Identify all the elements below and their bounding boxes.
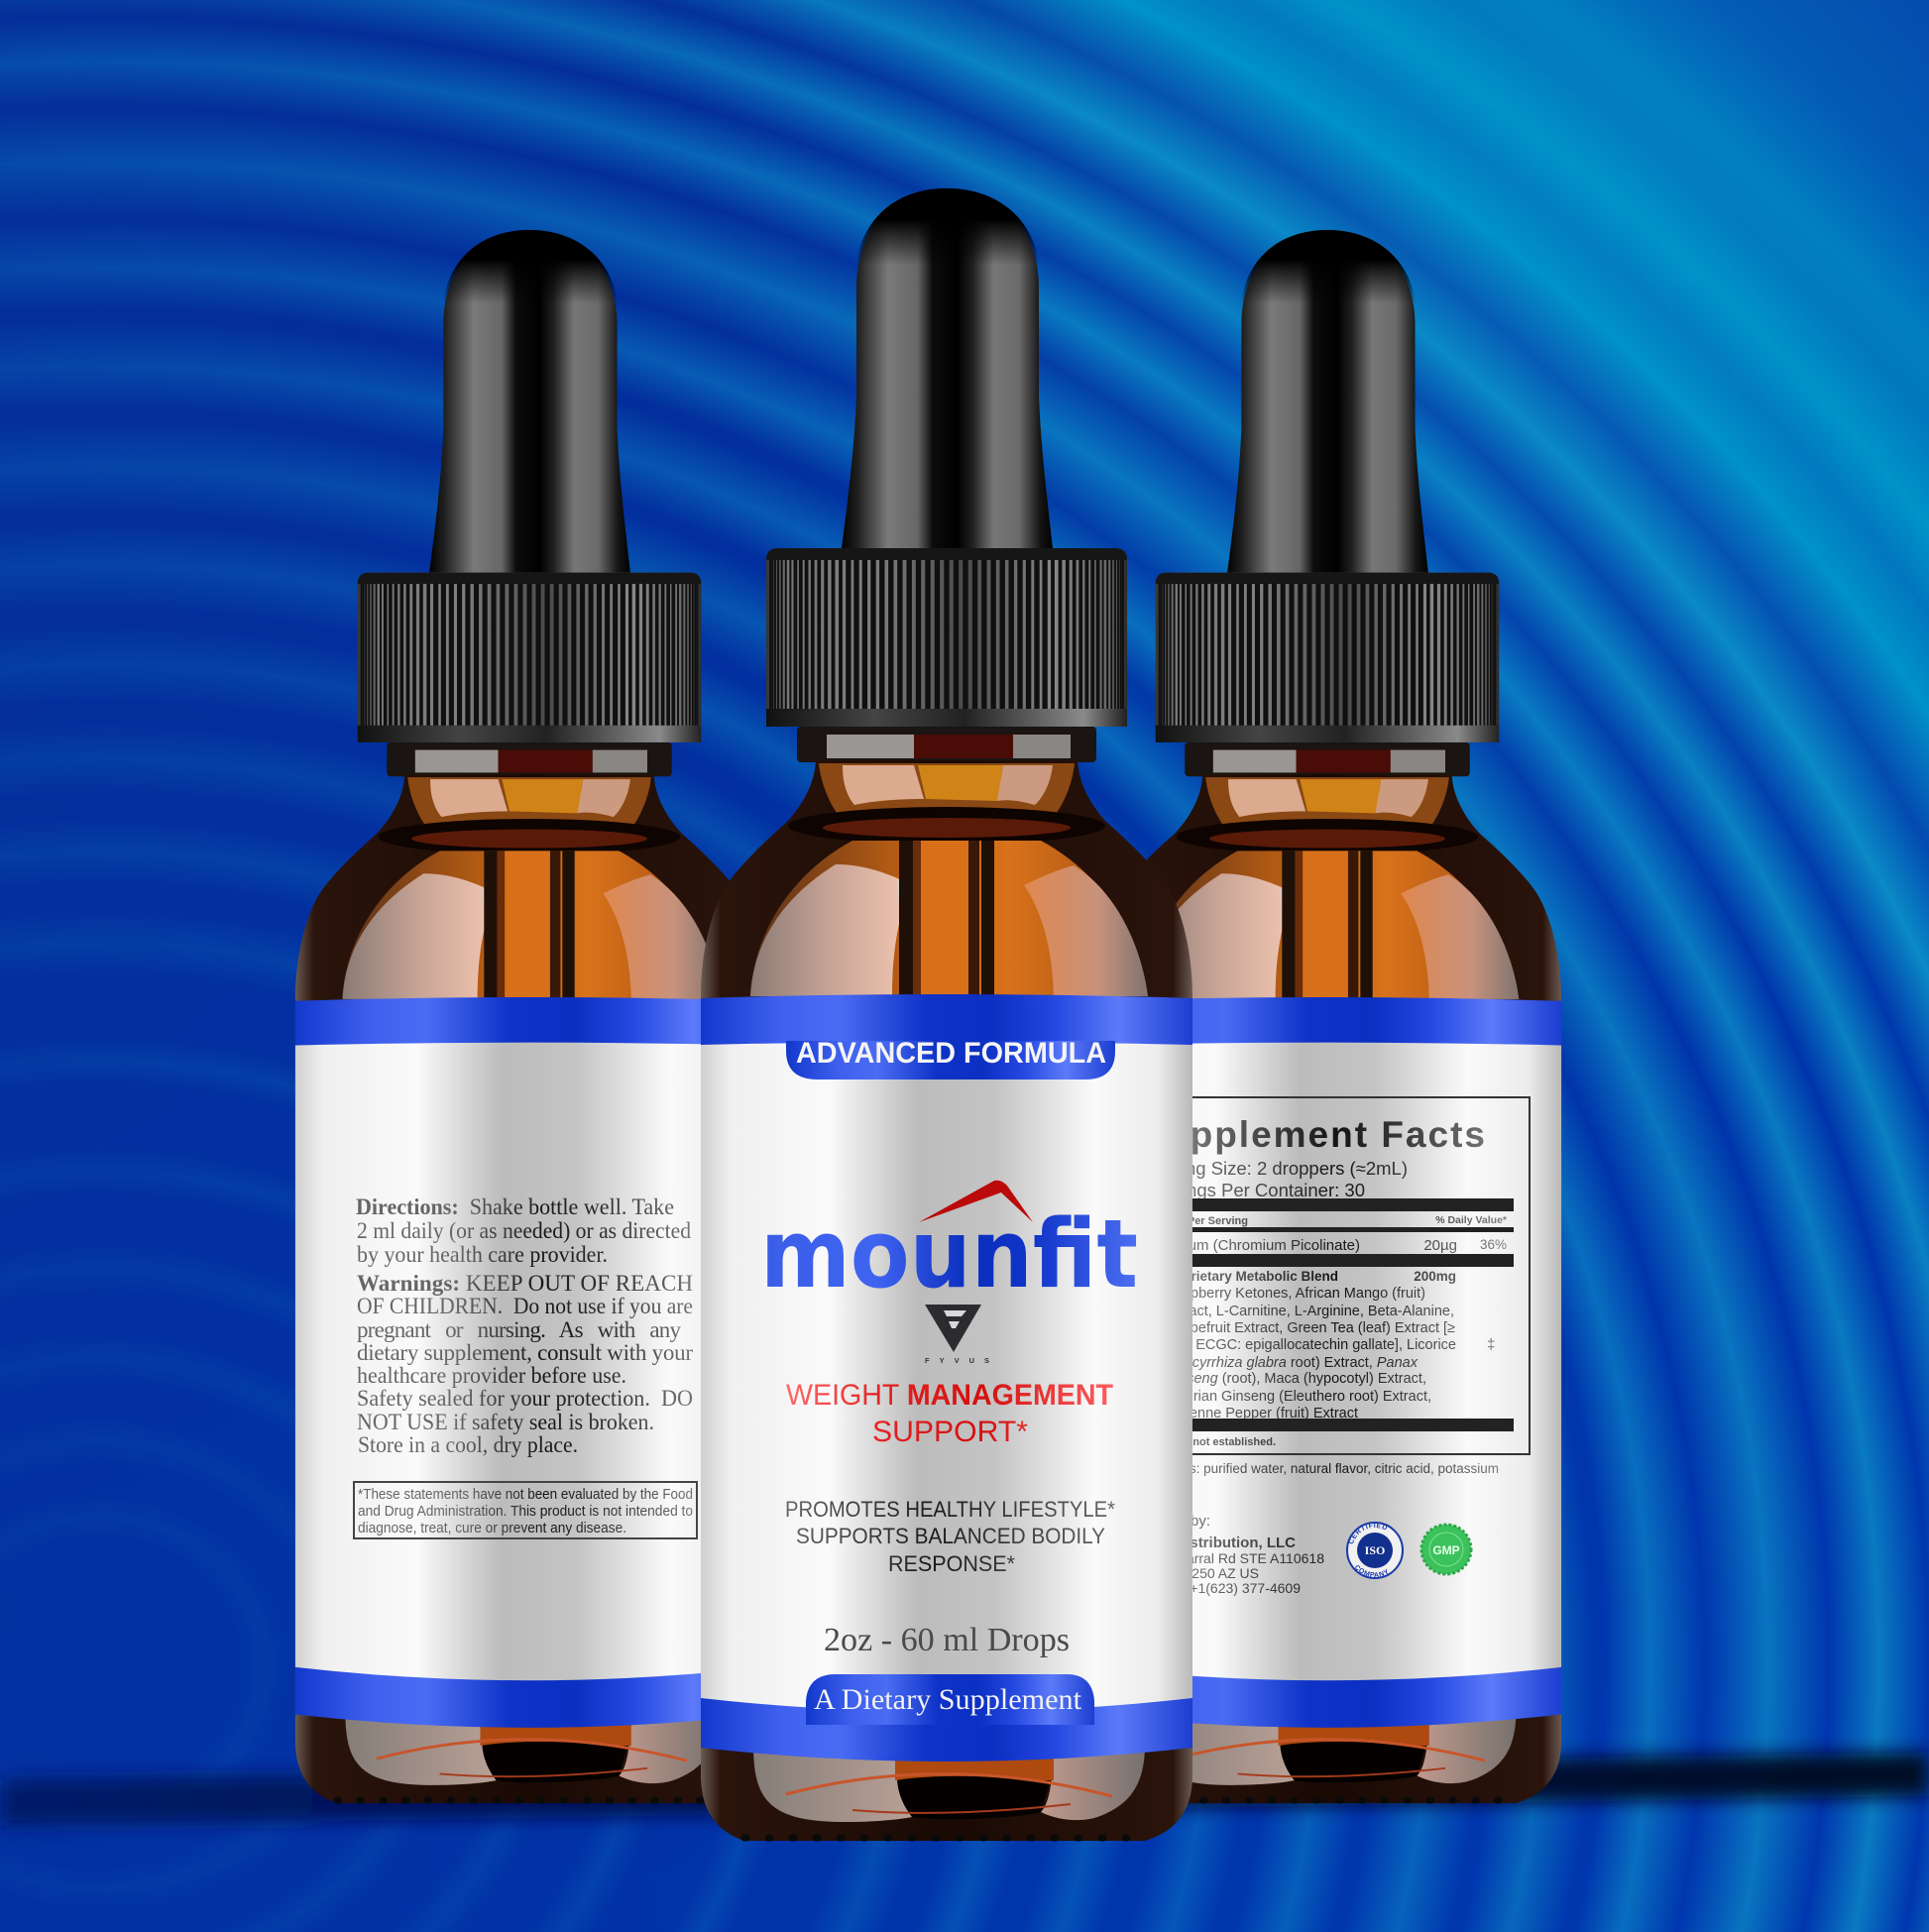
bottle: right (supplement facts) bbox=[1092, 230, 1562, 1804]
supplement facts panel: Ginseng (root), Maca (hypocotyl) Extract, bbox=[1165, 1371, 1426, 1387]
supplement facts panel: ‡Daily Value not established. bbox=[1126, 1436, 1276, 1448]
supplement facts panel: Supplement Facts bbox=[1139, 1114, 1487, 1155]
text block: directions and warnings: pregnant or nursing. As with any bbox=[357, 1317, 682, 1342]
text block: directions and warnings: Safety sealed for your protection. DO bbox=[357, 1386, 693, 1411]
FDA disclaimer box: diagnose, treat, cure or prevent any disease. bbox=[358, 1520, 626, 1536]
floor shadow at the horizon bbox=[0, 1753, 1929, 1826]
supplement facts panel: 200mg bbox=[1414, 1269, 1456, 1284]
supplement facts panel: Siberian Ginseng (Eleuthero root) Extract, bbox=[1165, 1389, 1431, 1405]
benefits text: RESPONSE* bbox=[888, 1551, 1015, 1576]
supplement facts panel: 20µg bbox=[1423, 1237, 1457, 1254]
text block: directions and warnings: dietary supplement, consult with your bbox=[357, 1340, 693, 1365]
logo: FYVUS: FYVUS bbox=[925, 1356, 999, 1365]
supplement facts panel: Cayenne Pepper (fruit) Extract bbox=[1164, 1406, 1358, 1421]
benefits text: SUPPORTS BALANCED BODILY bbox=[796, 1524, 1105, 1548]
icon: ISO badge: COMPANY bbox=[1355, 1565, 1388, 1577]
supplement facts panel bbox=[1110, 1097, 1530, 1454]
claim: weight management support: WEIGHT MANAGEMENT bbox=[786, 1379, 1113, 1412]
size: 2oz - 60 ml drops: 2oz - 60 ml Drops bbox=[824, 1622, 1070, 1658]
icon: GMP badge bbox=[1421, 1525, 1471, 1574]
text block: directions and warnings: Store in a cool, dry place. bbox=[358, 1432, 578, 1457]
supplement facts panel: Servings Per Container: 30 bbox=[1145, 1180, 1365, 1200]
text block: directions and warnings: by your health care provider. bbox=[357, 1242, 608, 1267]
text block: directions and warnings: 2 ml daily (or as needed) or as directed bbox=[357, 1218, 691, 1243]
supplement facts panel: Chromium (Chromium Picolinate) bbox=[1140, 1237, 1360, 1254]
FDA disclaimer box bbox=[354, 1482, 697, 1538]
supplement facts panel: % Daily Value* bbox=[1435, 1214, 1508, 1226]
icon: ISO badge bbox=[1346, 1522, 1404, 1579]
FDA disclaimer box: *These statements have not been evaluated by the Food bbox=[358, 1486, 693, 1503]
text block: directions and warnings: OF CHILDREN. Do not use if you are bbox=[357, 1294, 693, 1318]
badge: a dietary supplement: A Dietary Supplement bbox=[814, 1683, 1082, 1716]
icon: ISO badge: ISO bbox=[1365, 1543, 1385, 1557]
other ingredients and distributor bbox=[1092, 1461, 1499, 1596]
other ingredients and distributor: 4340 E Chaparral Rd STE A110618 bbox=[1105, 1550, 1324, 1566]
badge: advanced formula: ADVANCED FORMULA bbox=[796, 1037, 1106, 1070]
supplement facts panel: 50% ECGC: epigallocatechin gallate], Licorice bbox=[1163, 1337, 1456, 1353]
text block: directions and warnings bbox=[356, 1194, 693, 1457]
benefits text: PROMOTES HEALTHY LIFESTYLE* bbox=[785, 1497, 1115, 1522]
supplement facts panel: Proprietary Metabolic Blend bbox=[1161, 1269, 1338, 1284]
supplement facts panel: (Glycyrrhiza glabra root) Extract, Panax bbox=[1166, 1355, 1418, 1371]
text block: directions and warnings: Warnings: KEEP OUT OF REACH bbox=[357, 1271, 693, 1296]
other ingredients and distributor: Fyvus Distribution, LLC bbox=[1128, 1534, 1296, 1551]
badge: a dietary supplement bbox=[806, 1674, 1094, 1725]
text block: directions and warnings: healthcare provider before use. bbox=[357, 1363, 626, 1388]
supplement facts panel: 36% bbox=[1480, 1237, 1507, 1252]
supplement facts panel: Extract, L-Carnitine, L-Arginine, Beta-Alanine, bbox=[1164, 1304, 1454, 1319]
logo: mounfit wordmark: mounfit bbox=[760, 1200, 1138, 1309]
logo: FYVUS bbox=[925, 1305, 999, 1365]
text block: directions and warnings: NOT USE if safety seal is broken. bbox=[357, 1410, 654, 1434]
bottle: center (front label) bbox=[701, 188, 1192, 1841]
claim: weight management support: SUPPORT* bbox=[872, 1416, 1028, 1448]
supplement facts panel: Raspberry Ketones, African Mango (fruit) bbox=[1165, 1286, 1425, 1302]
other ingredients and distributor: Distributed by: bbox=[1115, 1513, 1210, 1530]
other ingredients and distributor: +1(623) 377-4609 bbox=[1190, 1580, 1301, 1596]
bottle: left (directions and warnings) bbox=[295, 230, 763, 1803]
icon: ISO badge: CERTIFIED bbox=[1349, 1524, 1388, 1544]
FDA disclaimer box: and Drug Administration. This product is not intended to bbox=[358, 1503, 693, 1520]
icon: GMP badge: GMP bbox=[1432, 1543, 1460, 1557]
other ingredients and distributor: Scottsdale 85250 AZ US bbox=[1107, 1565, 1259, 1581]
supplement facts panel: ‡ bbox=[1487, 1336, 1495, 1353]
supplement facts panel: Grapefruit Extract, Green Tea (leaf) Extract [≥ bbox=[1167, 1320, 1455, 1336]
supplement facts panel: Serving Size: 2 droppers (≈2mL) bbox=[1144, 1158, 1408, 1179]
benefits text bbox=[785, 1497, 1115, 1576]
claim: weight management support bbox=[786, 1379, 1113, 1448]
text block: directions and warnings: Directions: Shake bottle well. Take bbox=[356, 1194, 674, 1219]
supplement facts panel: Amount Per Serving bbox=[1143, 1215, 1248, 1227]
other ingredients and distributor: Other Ingredients: purified water, natural flavor, citric acid, potassium bbox=[1092, 1461, 1499, 1476]
